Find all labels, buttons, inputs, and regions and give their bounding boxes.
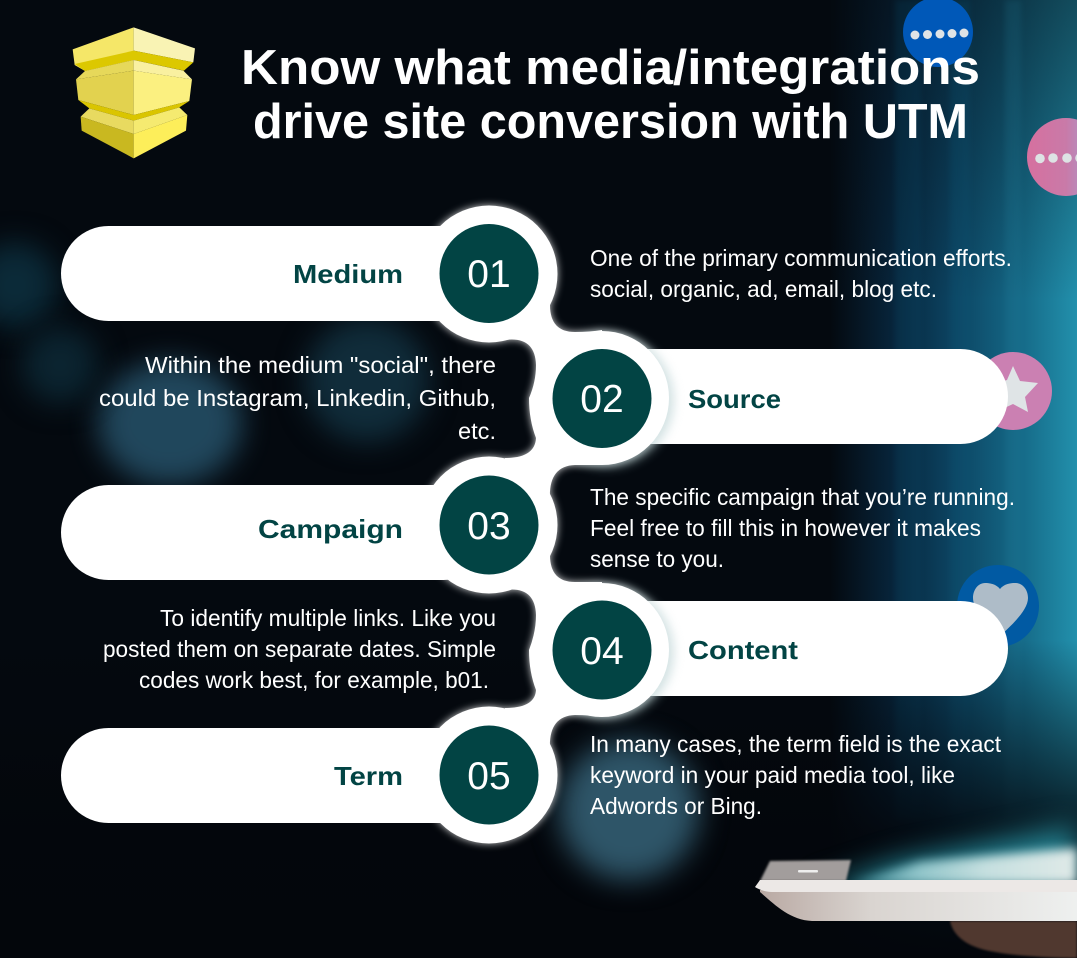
badge 03: 03 (467, 505, 511, 548)
pill: Medium (61, 226, 491, 321)
pill: Content (600, 601, 1008, 696)
title: Know what media/integrations (241, 41, 980, 95)
heading: Source: Source (688, 384, 781, 414)
badge 04: 04 (580, 630, 624, 673)
title (241, 41, 980, 149)
badge 02: 02 (580, 378, 624, 421)
icon: blue heart circle (957, 565, 1039, 647)
badge 01 (440, 224, 538, 323)
tablet and hand (755, 825, 1077, 958)
heading: Campaign: Campaign (258, 514, 403, 544)
logo: yellow stacked hexagon (73, 27, 195, 158)
text: medium description: One of the primary communication efforts. (590, 245, 1012, 271)
text: content description (103, 605, 496, 693)
text: content description: codes work best, for example, b01. (139, 667, 489, 693)
ring shadows on pills (538, 332, 674, 720)
text: source description: Within the medium "social", there (145, 352, 496, 378)
badge 04 (552, 600, 652, 700)
text: campaign description: sense to you. (590, 546, 724, 572)
text: source description: etc. (458, 418, 496, 444)
text: medium description: social, organic, ad, email, blog etc. (590, 276, 937, 302)
pill: Campaign (61, 485, 491, 580)
text: campaign description: Feel free to fill this in however it makes (590, 515, 981, 541)
text: content description: posted them on separate dates. Simple (103, 636, 496, 662)
text: source description: could be Instagram, Linkedin, Github, (99, 385, 496, 411)
heading: Medium: Medium (293, 259, 403, 289)
badge 02 (552, 349, 652, 448)
text: content description: To identify multiple links. Like you (160, 605, 496, 631)
glow around connected rings (420, 206, 669, 844)
text: term description: Adwords or Bing. (590, 793, 762, 819)
text: campaign description (590, 484, 1015, 572)
text: term description: In many cases, the term field is the exact (590, 731, 1002, 757)
heading: Content: Content (688, 635, 798, 665)
badge 01: 01 (467, 253, 511, 296)
icon: pink speech dots circle (1027, 118, 1077, 196)
ring connectors (420, 206, 669, 844)
pill: Term (61, 728, 491, 823)
title: drive site conversion with UTM (253, 95, 968, 149)
badge 05: 05 (467, 755, 511, 798)
text: term description (590, 731, 1002, 819)
heading: Term: Term (334, 761, 403, 791)
pill: Source (600, 349, 1008, 444)
text: term description: keyword in your paid media tool, like (590, 762, 955, 788)
icon: pink star circle (974, 352, 1052, 430)
badge 03 (440, 476, 538, 574)
white connected timeline shape (61, 206, 1008, 844)
icon: blue speech dots circle (903, 0, 973, 67)
badge 05 (440, 726, 538, 824)
text: source description (99, 352, 496, 444)
text: campaign description: The specific campaign that you’re running. (590, 484, 1015, 510)
text: medium description (590, 245, 1012, 302)
